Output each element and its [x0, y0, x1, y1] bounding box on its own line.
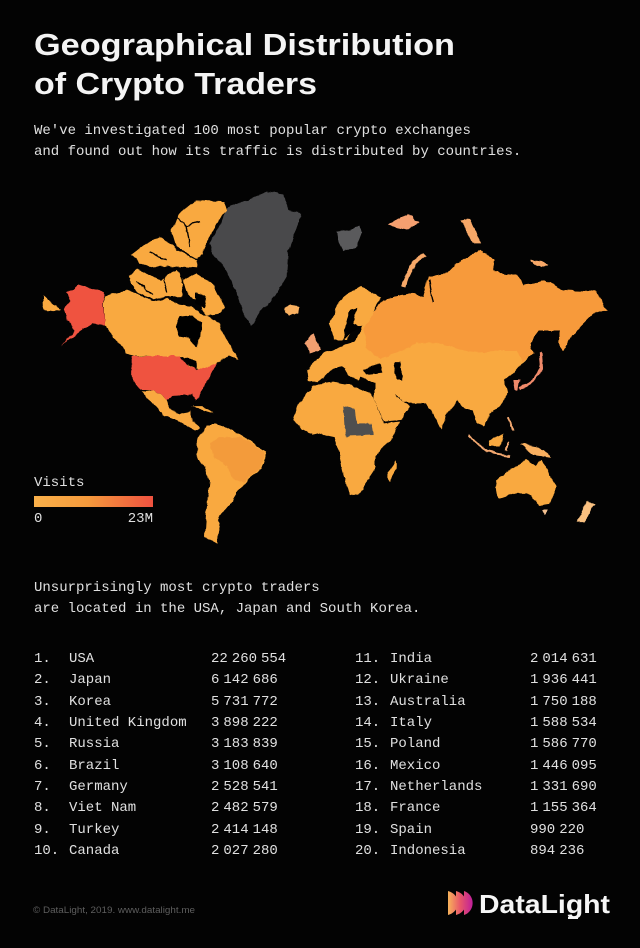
map: Americas	[43, 192, 302, 543]
ranking table: right column: 1 588 534	[530, 715, 597, 731]
ranking table: right column: Poland	[390, 736, 440, 752]
Cuba	[192, 407, 215, 413]
world map	[43, 192, 607, 543]
summary text	[34, 580, 420, 617]
legend: 0	[34, 511, 42, 527]
ranking table: right column: 894 236	[530, 843, 584, 859]
UK	[305, 333, 322, 353]
ranking table: left column: Germany	[69, 779, 128, 795]
Japan	[520, 352, 542, 388]
ranking table: left column: USA	[69, 651, 95, 667]
ranking table: right column: Ukraine	[390, 672, 449, 688]
New Zealand	[577, 500, 595, 522]
Australia	[495, 460, 557, 505]
title: of Crypto Traders	[34, 66, 317, 101]
ranking table: left column	[34, 651, 286, 859]
ranking table: right column: 1 331 690	[530, 779, 597, 795]
ranking table: right column: 15.	[355, 736, 380, 752]
Franz Josef Land	[388, 213, 420, 230]
ranking table: left column: 3.	[34, 694, 51, 710]
Chad	[343, 407, 373, 436]
Severnaya Zemlya	[460, 218, 482, 243]
ranking table: right column: 16.	[355, 758, 380, 774]
ranking table: right column: 1 750 188	[530, 694, 597, 710]
ranking table: left column: 9.	[34, 822, 51, 838]
ranking table: left column: 6.	[34, 758, 51, 774]
ranking table: right column: 11.	[355, 651, 380, 667]
ranking table: left column: Russia	[69, 736, 119, 752]
ranking table: left column: Turkey	[69, 822, 119, 838]
ranking table: right column: 20.	[355, 843, 380, 859]
title: Geographical Distribution	[34, 27, 455, 62]
Eurasia: Europe, Middle East, China, India, SE Asia	[307, 250, 607, 430]
ranking table: left column: 7.	[34, 779, 51, 795]
USA	[132, 356, 217, 400]
ranking table: left column: 2 414 148	[211, 822, 278, 838]
ranking table: left column: 10.	[34, 843, 59, 859]
Canada	[104, 290, 238, 371]
ranking table: left column: 2 027 280	[211, 843, 278, 859]
ranking table: left column: 2.	[34, 672, 51, 688]
Iceland	[283, 305, 299, 316]
New Siberian Islands	[530, 260, 550, 268]
Novaya Zemlya	[403, 255, 424, 286]
ranking table: right column: Australia	[390, 694, 466, 710]
New Guinea	[520, 443, 552, 457]
ranking table: left column: 3 898 222	[211, 715, 278, 731]
ranking table: right column: France	[390, 800, 440, 816]
ranking table: left column: Brazil	[69, 758, 119, 774]
summary text: are located in the USA, Japan and South Korea.	[34, 601, 420, 617]
South America	[197, 425, 267, 543]
ranking table: right column: 19.	[355, 822, 380, 838]
Russia	[363, 250, 607, 362]
Great Lakes	[181, 358, 197, 370]
Chukotka	[43, 295, 60, 312]
Greenland	[210, 192, 302, 327]
ranking table: right column: 12.	[355, 672, 380, 688]
ranking table: left column: Japan	[69, 672, 111, 688]
Tasmania	[542, 510, 548, 515]
ranking table: right column: 990 220	[530, 822, 584, 838]
ranking table: left column: 8.	[34, 800, 51, 816]
ranking table: right column: Spain	[390, 822, 432, 838]
Mexico and Central America	[142, 390, 200, 430]
title	[34, 27, 455, 101]
Alaska	[62, 285, 104, 345]
legend	[34, 475, 153, 527]
summary text: Unsurprisingly most crypto traders	[34, 580, 320, 596]
ranking table: right column: Indonesia	[390, 843, 466, 859]
ranking table: left column: Canada	[69, 843, 119, 859]
ranking table: right column: 2 014 631	[530, 651, 597, 667]
Madagascar	[387, 460, 397, 482]
Indonesia and Philippines	[468, 417, 513, 456]
legend: Visits	[34, 475, 84, 491]
ranking table: right column: Mexico	[390, 758, 440, 774]
ranking table: right column: 1 586 770	[530, 736, 597, 752]
ranking table: left column: Korea	[69, 694, 111, 710]
ranking table: left column: Viet Nam	[69, 800, 136, 816]
ranking table: left column: 5.	[34, 736, 51, 752]
ranking table: left column: 2 528 541	[211, 779, 278, 795]
intro text	[34, 123, 521, 160]
ranking table: left column: 4.	[34, 715, 51, 731]
ranking table: left column: 5 731 772	[211, 694, 278, 710]
Brazil	[210, 437, 265, 482]
intro text: and found out how its traffic is distributed by countries.	[34, 144, 521, 160]
Korea	[513, 380, 520, 389]
icon: logo mark	[448, 891, 473, 915]
ranking table: left column: 1.	[34, 651, 51, 667]
ranking table: right column: 18.	[355, 800, 380, 816]
Svalbard	[337, 227, 362, 252]
ranking table: left column: 6 142 686	[211, 672, 278, 688]
ranking table: right column: India	[390, 651, 432, 667]
ranking table: right column: 13.	[355, 694, 380, 710]
legend: 23M	[128, 511, 153, 527]
intro text: We've investigated 100 most popular crypto exchanges	[34, 123, 471, 139]
footer credit: © DataLight, 2019. www.datalight.me	[33, 905, 195, 916]
ranking table: left column: 22 260 554	[211, 651, 286, 667]
DataLight logo: DataLight	[479, 889, 610, 919]
ranking table: right column: 1 446 095	[530, 758, 597, 774]
ranking table: left column: 3 108 640	[211, 758, 278, 774]
Borneo	[488, 433, 503, 447]
ranking table: right column: 14.	[355, 715, 380, 731]
Canadian Arctic islands	[128, 200, 227, 317]
map: Eurasia, Africa, Oceania	[293, 213, 607, 522]
ranking table: right column: 1 936 441	[530, 672, 597, 688]
ranking table: left column: 3 183 839	[211, 736, 278, 752]
ranking table: right column: Netherlands	[390, 779, 482, 795]
Hudson Bay	[175, 293, 207, 348]
ranking table: right column: Italy	[390, 715, 432, 731]
ranking table: right column: 1 155 364	[530, 800, 597, 816]
ranking table: right column: 17.	[355, 779, 380, 795]
ranking table: left column: United Kingdom	[69, 715, 187, 731]
ranking table: left column: 2 482 579	[211, 800, 278, 816]
ranking table: right column	[355, 651, 597, 859]
Africa	[293, 382, 400, 497]
inland seas	[343, 308, 402, 380]
